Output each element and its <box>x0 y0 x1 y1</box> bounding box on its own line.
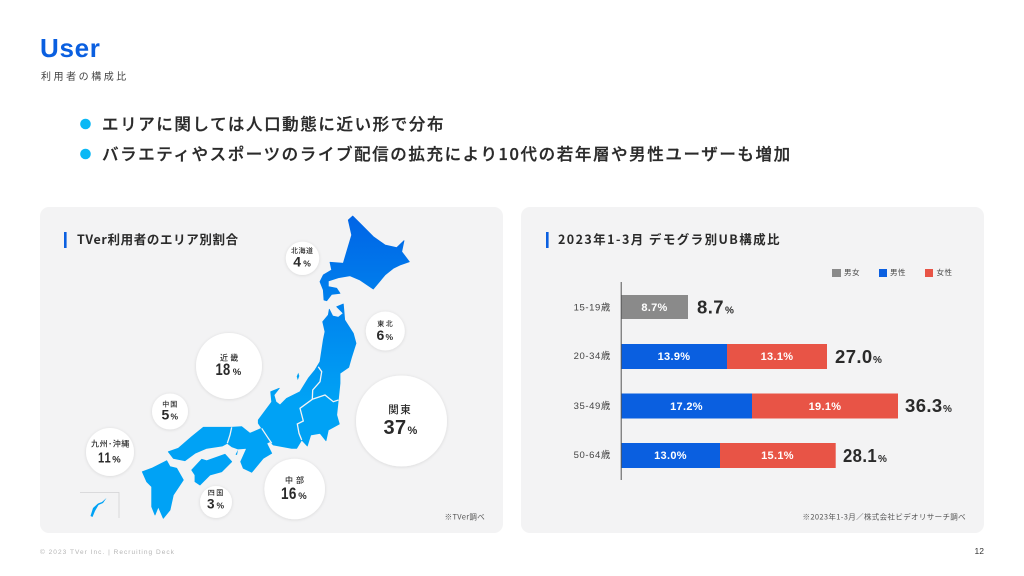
bar row: 35-49: 36.3 <box>905 395 943 416</box>
bar row: 20-34: 13.9% <box>658 351 690 363</box>
source note: ※2023年1-3月／株式会社ビデオリサーチ調べ <box>803 512 966 522</box>
callout: Kinki 18%: 18 <box>216 361 230 379</box>
bar row: 20-34: 27.0 <box>835 346 873 367</box>
Shikoku <box>192 454 232 485</box>
bar row: 50-64: 15.1% <box>761 450 794 462</box>
regional border lines <box>227 367 338 443</box>
axis line <box>621 282 622 480</box>
key point one: エリアに関しては人口動態に近い形で分布 <box>102 111 445 135</box>
callout: Shikoku 3%: 3 <box>207 496 215 512</box>
bar row: 35-49 <box>574 394 952 418</box>
bar row: 50-64: 28.1 <box>843 445 877 466</box>
panel heading: TVer利用者のエリア別割合 <box>77 229 239 248</box>
callout: Kanto 37%: 関東 <box>388 403 411 416</box>
source note: ※TVer調べ <box>445 512 485 522</box>
bar row: 15-19: % <box>725 306 734 316</box>
callout: Tohoku 6%: 6 <box>376 327 385 343</box>
callout: Hokkaido 4%: 北海道 <box>291 246 313 255</box>
callout: Kyushu Okinawa 11%: 九州･沖縄 <box>91 438 129 448</box>
Sado island <box>297 373 299 380</box>
legend: 女性 <box>936 267 952 278</box>
bar row: 50-64 <box>574 443 887 468</box>
callout: Shikoku 3% <box>200 486 232 518</box>
callout: Kanto 37%: 37 <box>384 417 407 439</box>
panel: area share map <box>40 207 503 533</box>
bar row: 15-19: 8.7 <box>697 296 724 318</box>
icon: bullet two <box>80 149 91 159</box>
bar row: 35-49: 19.1% <box>809 401 841 413</box>
Hokkaido <box>320 216 409 301</box>
panel heading marker <box>546 232 549 248</box>
callout: Hokkaido 4%: % <box>303 259 311 269</box>
callout: Kinki 18%: 近畿 <box>220 352 238 362</box>
callout: Kyushu Okinawa 11%: % <box>112 454 121 465</box>
callout: Shikoku 3%: 四国 <box>208 489 223 497</box>
bar row: 50-64: 13.0% <box>654 450 687 462</box>
map of Japan <box>142 216 409 518</box>
bar row: 15-19 <box>574 295 734 319</box>
panel heading marker <box>64 232 67 248</box>
bar row: 20-34: % <box>873 355 882 366</box>
callout: Kinki 18%: % <box>233 367 242 378</box>
callout: Chubu 16%: 16 <box>281 485 297 503</box>
page number: 12 <box>975 546 984 556</box>
callout: Chugoku 5% <box>152 394 188 430</box>
callout: Chubu 16%: 中部 <box>285 475 304 485</box>
callout: Tohoku 6%: 東北 <box>377 319 393 328</box>
legend: 男女 <box>844 267 860 278</box>
callout: Tohoku 6% <box>366 312 405 350</box>
Okinawa inset <box>80 492 119 518</box>
legend <box>832 267 952 278</box>
callout: Kyushu Okinawa 11% <box>86 428 134 476</box>
bar row: 15-19: 8.7% <box>641 302 668 314</box>
Honshu <box>168 304 356 472</box>
bar row: 35-49: 35-49歳 <box>574 400 611 412</box>
panel heading: 2023年1-3月 デモグラ別UB構成比 <box>558 229 781 248</box>
title: User <box>40 33 101 63</box>
callout: Hokkaido 4% <box>286 242 319 275</box>
key points <box>80 111 792 165</box>
bar row: 50-64: % <box>878 454 887 465</box>
callout: Chugoku 5%: 5 <box>162 406 170 422</box>
Kyushu <box>142 461 183 518</box>
icon: bullet one <box>80 119 91 129</box>
footer copyright: © 2023 TVer Inc. | Recruiting Deck <box>40 548 175 556</box>
callout: Chubu 16% <box>264 459 325 519</box>
callout: Hokkaido 4%: 4 <box>293 254 301 270</box>
bar row: 50-64: 50-64歳 <box>574 449 611 461</box>
callout: Chubu 16%: % <box>298 491 307 502</box>
subtitle: 利用者の構成比 <box>41 68 129 83</box>
callout: Chugoku 5%: % <box>170 411 178 421</box>
Awaji island <box>236 450 238 455</box>
bar row: 20-34: 13.1% <box>761 351 793 363</box>
callout: Tohoku 6%: % <box>386 332 394 342</box>
callout: Kyushu Okinawa 11%: 11 <box>98 449 111 466</box>
legend: 男性 <box>890 267 906 278</box>
callout: Kinki 18% <box>196 333 262 399</box>
callout: Kanto 37%: % <box>408 425 418 437</box>
bar chart <box>574 282 952 480</box>
key point two: バラエティやスポーツのライブ配信の拡充により10代の若年層や男性ユーザーも増加 <box>102 141 792 165</box>
callout: Kanto 37% <box>356 376 447 466</box>
bar row: 20-34: 20-34歳 <box>574 350 611 362</box>
bar row: 35-49: % <box>943 404 952 415</box>
panel: demographics chart <box>521 207 984 533</box>
bar row: 15-19: 15-19歳 <box>574 302 611 314</box>
callout: Shikoku 3%: % <box>216 500 224 510</box>
bar row: 35-49: 17.2% <box>670 401 703 413</box>
bar row: 20-34 <box>574 344 882 369</box>
callout: Chugoku 5%: 中国 <box>162 400 177 409</box>
